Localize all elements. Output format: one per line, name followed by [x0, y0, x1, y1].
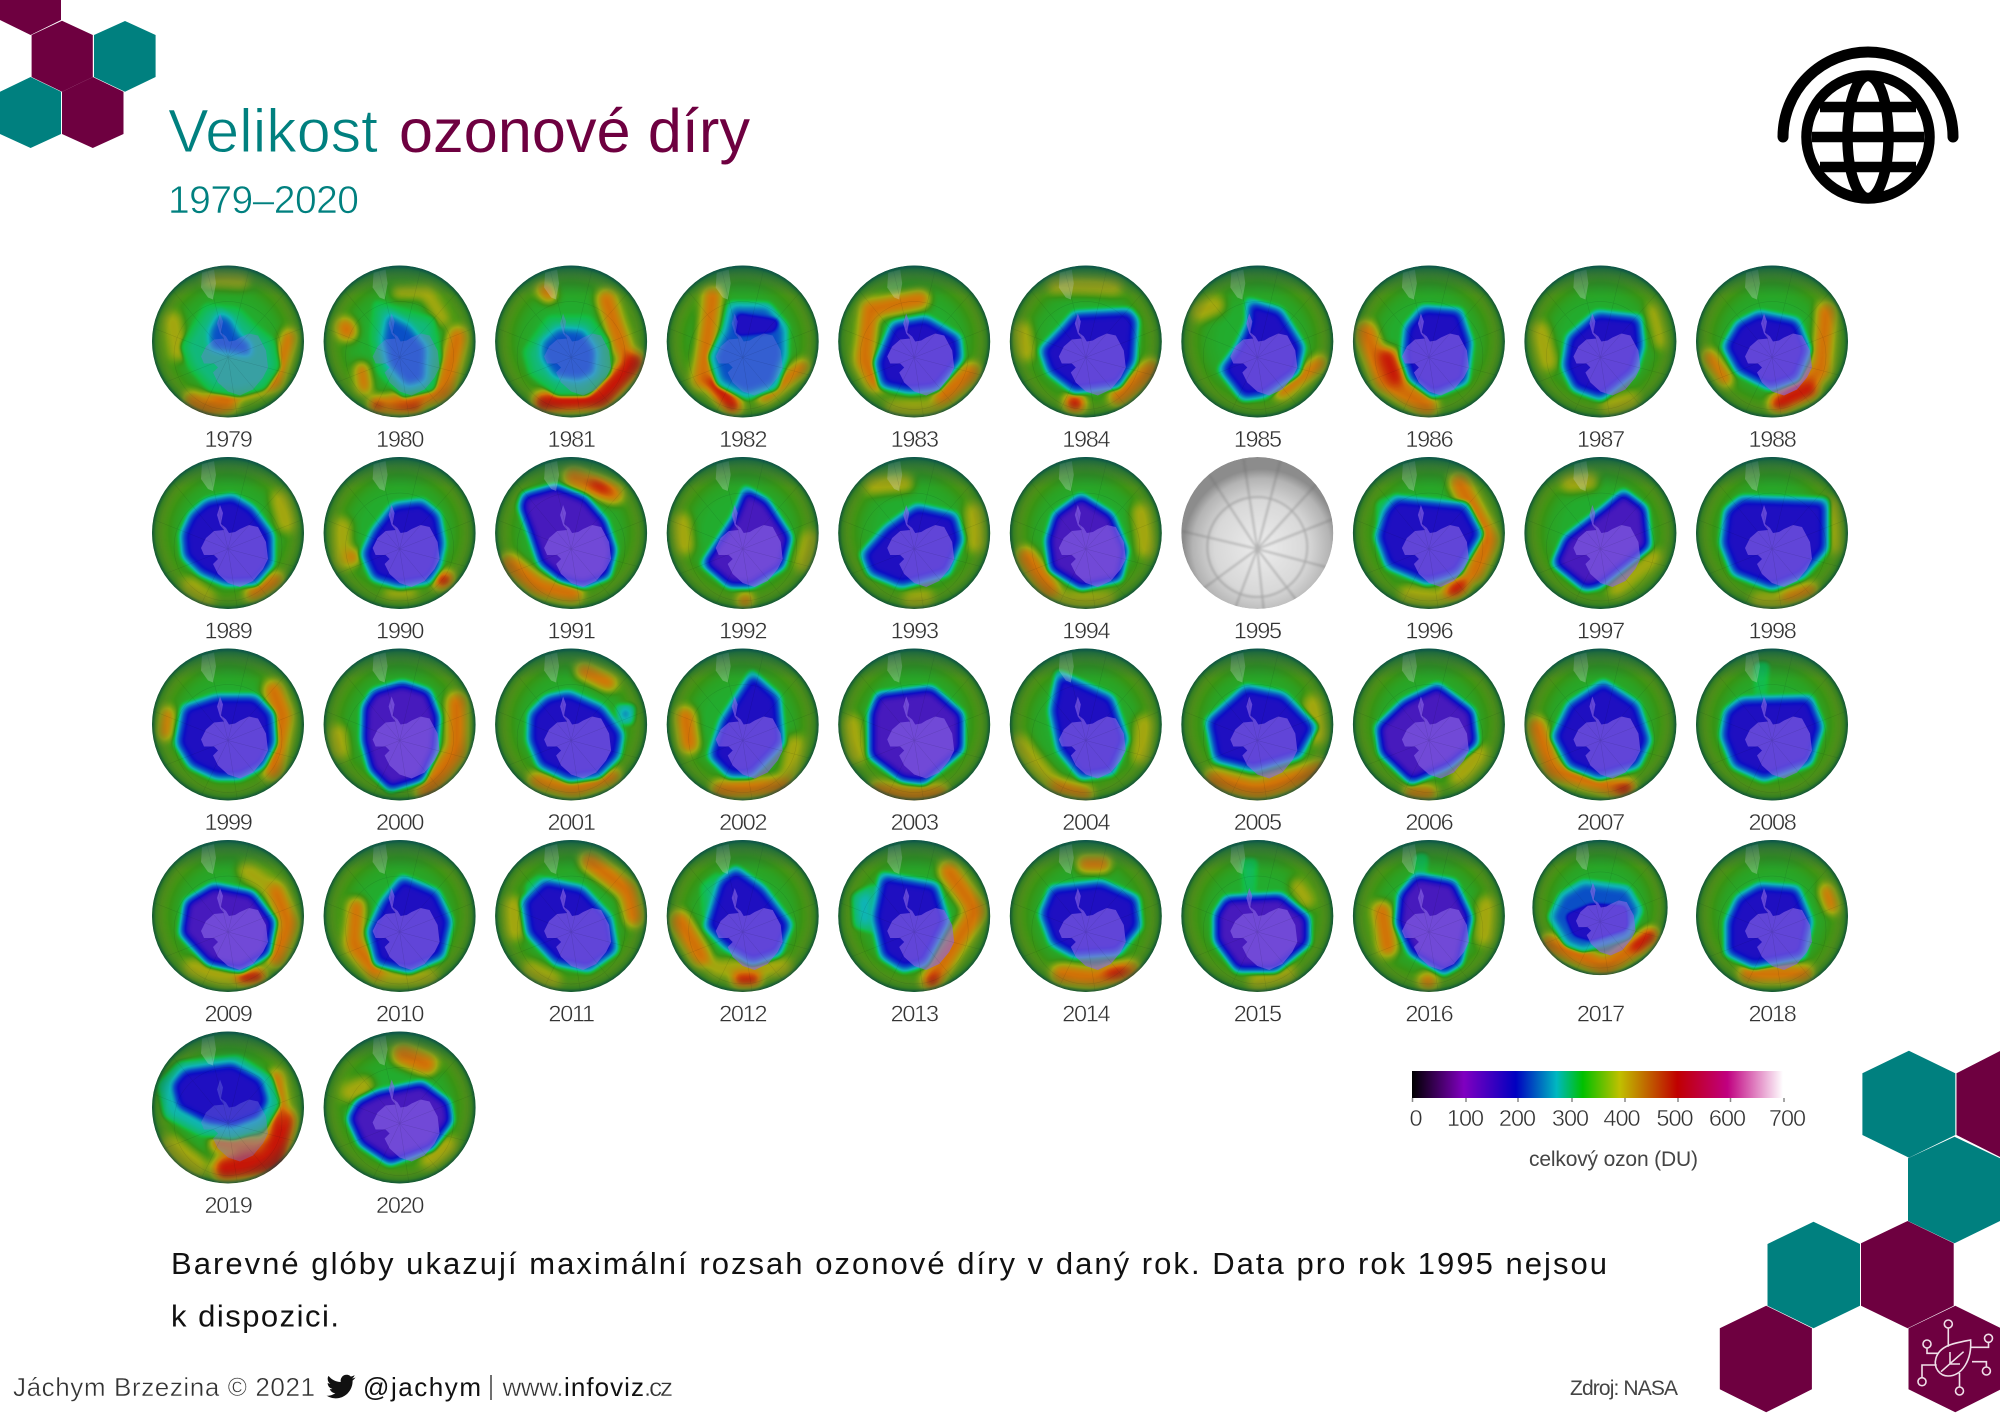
year label: 2008	[1748, 809, 1797, 835]
title: Velikost	[168, 97, 378, 165]
year label: 2003	[891, 809, 939, 835]
year label: 1989	[204, 618, 252, 644]
year label: 1988	[1748, 426, 1797, 452]
globe: 2017 smaller	[1524, 832, 1676, 989]
description text: Barevné glóby ukazují maximální rozsah ozonové díry v daný rok. Data pro rok 1995 nejsou	[171, 1246, 1607, 1281]
globe: 1981	[495, 266, 648, 418]
decorative hexagons: top left	[0, 0, 156, 148]
legend: colour scale	[1409, 1071, 1806, 1171]
globe: 2005	[1181, 648, 1334, 800]
year label: 1990	[376, 618, 424, 644]
globe: 2006	[1352, 648, 1505, 800]
tick marks and numbers: 700	[1769, 1105, 1806, 1131]
year label: 2014	[1062, 1000, 1111, 1026]
footer credits: Jáchym Brzezina © 2021	[13, 1372, 315, 1402]
icon: globe	[1783, 52, 1953, 198]
globe: 2004	[1010, 648, 1162, 800]
year label: 1999	[204, 809, 252, 835]
year label: 1983	[891, 426, 939, 452]
globe: 1983	[838, 266, 990, 418]
globe: 2018	[1687, 831, 1857, 1008]
year label: 1995	[1234, 618, 1282, 644]
year label: 2010	[376, 1000, 424, 1026]
footer credits: .cz	[644, 1372, 673, 1402]
year label: 2015	[1234, 1000, 1282, 1026]
footer credits: infoviz	[564, 1372, 644, 1402]
globe: 2000	[324, 648, 476, 800]
footer credits: www.	[502, 1372, 564, 1402]
year label: 2007	[1577, 809, 1624, 835]
year label: 1981	[548, 426, 595, 452]
year label: 2006	[1405, 809, 1454, 835]
source note: Zdroj: NASA	[1570, 1377, 1678, 1400]
globe: 1987	[1524, 266, 1676, 418]
year label: 2016	[1405, 1000, 1454, 1026]
year label: 2012	[719, 1000, 766, 1026]
globe: 1993	[838, 457, 990, 609]
globe: 1994	[1010, 457, 1162, 609]
globe: 2012	[658, 831, 828, 1008]
year label: 2005	[1234, 809, 1282, 835]
year label: 1984	[1062, 426, 1111, 452]
globe: 1996	[1352, 457, 1505, 609]
year label: 1991	[548, 618, 595, 644]
colour bar	[1412, 1071, 1783, 1098]
tick marks and numbers: 300	[1552, 1105, 1589, 1131]
globe: 1992	[666, 457, 819, 609]
globe: 1988	[1696, 266, 1848, 418]
year label: 1998	[1748, 618, 1797, 644]
year label: 2002	[719, 809, 766, 835]
tick marks and numbers: 500	[1656, 1105, 1694, 1131]
globe: 2010	[315, 831, 485, 1008]
globe: 1985	[1181, 266, 1334, 418]
year label: 1993	[891, 618, 939, 644]
globe: 1982	[666, 266, 819, 418]
footer credits	[13, 1372, 673, 1402]
tick marks and numbers: 200	[1499, 1105, 1536, 1131]
globe: 1980	[324, 266, 476, 418]
globe: 1998	[1696, 457, 1848, 609]
year label: 1986	[1405, 426, 1454, 452]
globe: 1989	[152, 457, 304, 609]
globe: 1990	[324, 457, 476, 609]
year label: 1980	[376, 426, 424, 452]
globe: 2020	[315, 1022, 485, 1200]
globe: 2016	[1344, 831, 1514, 1008]
year label: 2019	[204, 1192, 252, 1218]
globe: 1984	[1010, 266, 1162, 418]
tick marks and numbers	[1409, 1098, 1806, 1131]
tick marks and numbers: 600	[1709, 1105, 1746, 1131]
globe: 2007	[1524, 648, 1676, 800]
globe: 1979	[152, 266, 304, 418]
year label: 2020	[376, 1192, 424, 1218]
tick marks and numbers: 400	[1603, 1105, 1641, 1131]
year label: 2011	[548, 1000, 594, 1026]
globe: 1991	[495, 457, 648, 609]
globe: 1995 no data	[1181, 457, 1333, 625]
icon: twitter bird	[326, 1375, 356, 1398]
globe: 2008	[1687, 640, 1857, 816]
description text	[171, 1246, 1607, 1334]
year label: 2009	[204, 1000, 252, 1026]
year label: 1987	[1577, 426, 1624, 452]
year label: 1979	[204, 426, 252, 452]
title: ozonové díry	[399, 97, 750, 165]
decorative hexagons: bottom right	[1720, 1051, 2000, 1412]
year label: 2013	[891, 1000, 939, 1026]
globe: 2002	[666, 648, 819, 800]
year label: 2004	[1062, 809, 1111, 835]
globe: 1999	[152, 648, 304, 800]
legend caption: celkový ozon (DU)	[1529, 1148, 1698, 1171]
globe: 1986	[1352, 266, 1505, 418]
globe: 2019	[143, 1022, 313, 1200]
year label: 2018	[1748, 1000, 1797, 1026]
year label: 1997	[1577, 618, 1624, 644]
year label: 1994	[1062, 618, 1111, 644]
globe: 2009	[143, 831, 313, 1008]
globe: 2014	[1001, 831, 1171, 1008]
globe: 2013	[829, 831, 999, 1008]
globe: 2003	[838, 648, 990, 800]
year label: 1996	[1405, 618, 1454, 644]
description text: k dispozici.	[171, 1299, 339, 1334]
icon: leaf with circuit	[1918, 1320, 1992, 1395]
year label: 2000	[376, 809, 424, 835]
year label: 1992	[719, 618, 766, 644]
year label: 2017	[1577, 1000, 1624, 1026]
year label: 2001	[548, 809, 595, 835]
year label: 1985	[1234, 426, 1282, 452]
footer credits: @jachym	[363, 1372, 481, 1402]
globe: 2015	[1172, 831, 1342, 1008]
subtitle: 1979–2020	[168, 179, 359, 222]
globe: 2011	[486, 831, 656, 1008]
globe: 2001	[495, 648, 648, 800]
tick marks and numbers: 0	[1409, 1105, 1422, 1131]
globe: 1997	[1524, 457, 1676, 609]
tick marks and numbers: 100	[1447, 1105, 1484, 1131]
year label: 1982	[719, 426, 766, 452]
